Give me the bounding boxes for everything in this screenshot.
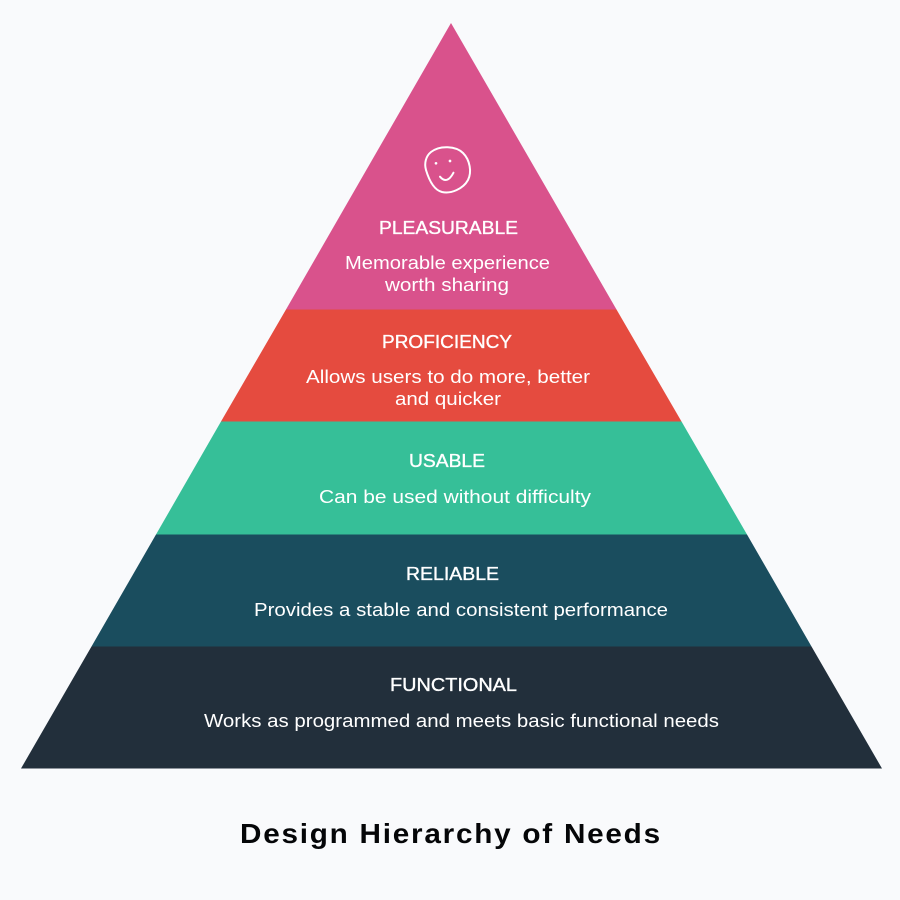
proficiency band	[221, 310, 682, 422]
text: pleasurable description	[345, 253, 550, 295]
heading: reliable: RELIABLE	[406, 564, 499, 584]
text: reliable description: Provides a stable and consistent performance	[254, 600, 668, 620]
functional band	[21, 646, 882, 768]
heading: functional: FUNCTIONAL	[390, 675, 517, 695]
heading: usable: USABLE	[409, 451, 485, 471]
text: proficiency description: and quicker	[395, 389, 501, 409]
title: Design Hierarchy of Needs	[240, 819, 660, 850]
icon: smiley face	[425, 147, 470, 192]
heading: pleasurable: PLEASURABLE	[379, 218, 518, 238]
text: functional description: Works as programmed and meets basic functional needs	[204, 711, 719, 731]
reliable band	[92, 534, 812, 646]
text: usable description: Can be used without difficulty	[319, 487, 591, 507]
panel: reliable tier	[92, 534, 812, 646]
usable band	[156, 422, 747, 534]
text: pleasurable description: worth sharing	[384, 275, 509, 295]
text: pleasurable description: Memorable experience	[345, 253, 550, 273]
pleasurable band	[286, 23, 616, 310]
panel: proficiency tier	[221, 310, 682, 422]
text: proficiency description: Allows users to do more, better	[306, 367, 590, 387]
heading: proficiency: PROFICIENCY	[382, 332, 512, 352]
panel: usable tier	[156, 422, 747, 534]
text: proficiency description	[306, 367, 590, 409]
panel: pleasurable tier	[286, 23, 616, 310]
panel: functional tier	[21, 646, 882, 768]
